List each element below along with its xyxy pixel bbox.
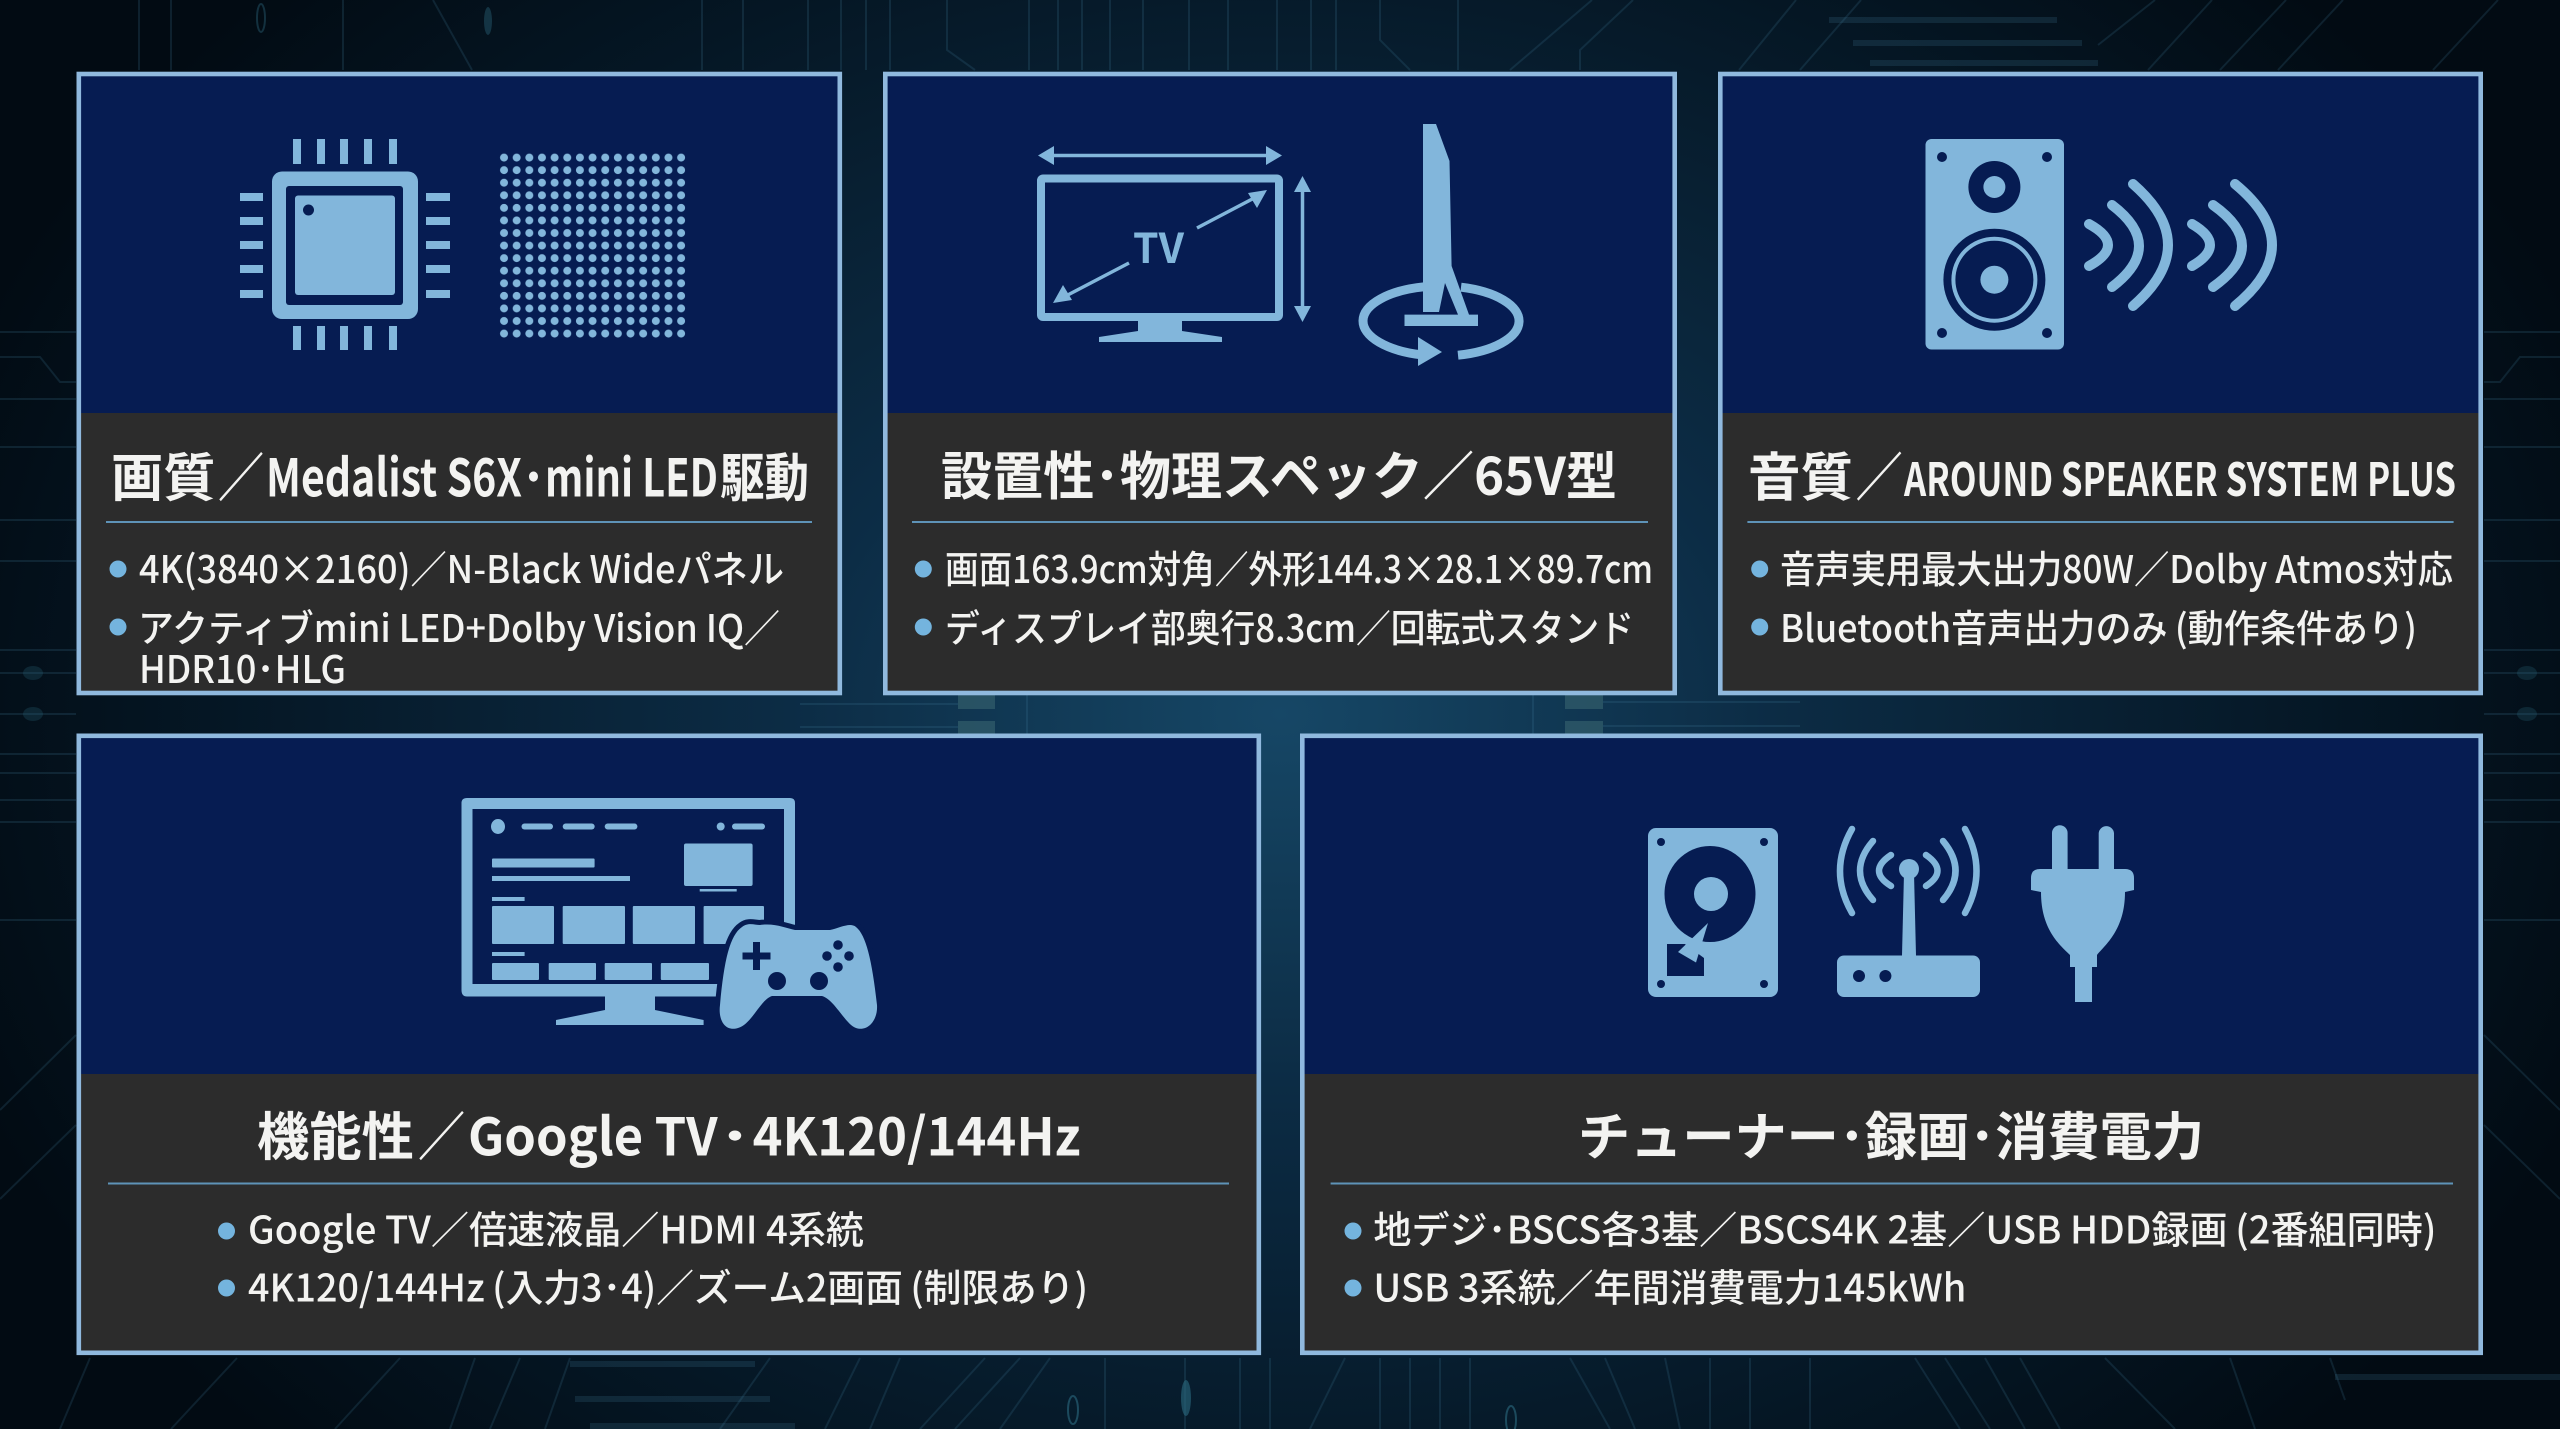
icon: processor chip: [240, 139, 450, 350]
heading: 機能性: [257, 1096, 414, 1170]
icon: TV dimensions: [1038, 146, 1311, 342]
panel: installation and physical specs: [883, 72, 1677, 695]
panel: tuner, recording, power consumption: [1300, 734, 2483, 1355]
heading: ／: [1856, 436, 1903, 511]
bullet list: [110, 539, 784, 694]
heading: Medalist S6X: [266, 436, 522, 512]
bullet list: ディスプレイ部奥行8.3cm／回転式スタンド: [945, 598, 1634, 653]
heading: Google TV: [468, 1096, 718, 1170]
heading: 設置性･物理スペック／65V型: [941, 435, 1617, 510]
bullet list: USB 3系統／年間消費電力145kWh: [1373, 1258, 1966, 1312]
panel: features: [76, 734, 1261, 1355]
bullet list: [1344, 1200, 2436, 1312]
heading: ／: [418, 1096, 465, 1170]
heading: mini LED: [545, 436, 718, 512]
bullet list: [1751, 539, 2453, 653]
bullet list: Bluetooth音声出力のみ (動作条件あり): [1780, 598, 2417, 653]
icon: power plug: [2031, 825, 2134, 1002]
bullet list: [218, 1200, 1088, 1312]
bullet list: 画面163.9cm対角／外形144.3×28.1×89.7cm: [945, 539, 1653, 594]
bullet list: HDR10･HLG: [139, 639, 346, 694]
panel: picture quality: [76, 72, 842, 695]
icon: speaker with sound waves: [1926, 139, 2272, 350]
heading: 画質: [111, 436, 216, 512]
icon: swivel stand side view: [1363, 124, 1519, 366]
heading: 駆動: [720, 436, 809, 512]
bullet list: 音声実用最大出力80W／Dolby Atmos対応: [1780, 539, 2453, 594]
heading: [1748, 436, 2456, 511]
heading: [111, 436, 809, 512]
heading: 4K120/144Hz: [753, 1096, 1081, 1170]
bullet list: アクティブmini LED+Dolby Vision IQ／: [138, 598, 780, 653]
heading: ／: [218, 436, 264, 512]
heading: ･: [522, 436, 545, 512]
icon: mini LED dot matrix: [498, 151, 688, 340]
icon: antenna router: [1837, 829, 1980, 997]
icon: game controller: [720, 924, 877, 1029]
heading: ･: [719, 1096, 751, 1170]
icon: TV dimensions: TV: [1133, 215, 1185, 275]
icon: smart TV with game controller: [462, 798, 877, 1029]
bullet list: [915, 539, 1653, 653]
bullet list: 地デジ･BSCS各3基／BSCS4K 2基／USB HDD録画 (2番組同時): [1373, 1200, 2436, 1254]
bullet list: Google TV／倍速液晶／HDMI 4系統: [248, 1200, 864, 1254]
panel: sound quality: [1718, 72, 2483, 695]
icon: hard disk drive: [1648, 828, 1778, 997]
bullet list: 4K120/144Hz (入力3･4)／ズーム2画面 (制限あり): [248, 1258, 1088, 1312]
bullet list: 4K(3840×2160)／N-Black Wideパネル: [139, 539, 784, 594]
heading: [257, 1096, 1081, 1170]
heading: チューナー･録画･消費電力: [1578, 1096, 2204, 1170]
heading: 音質: [1748, 436, 1853, 511]
